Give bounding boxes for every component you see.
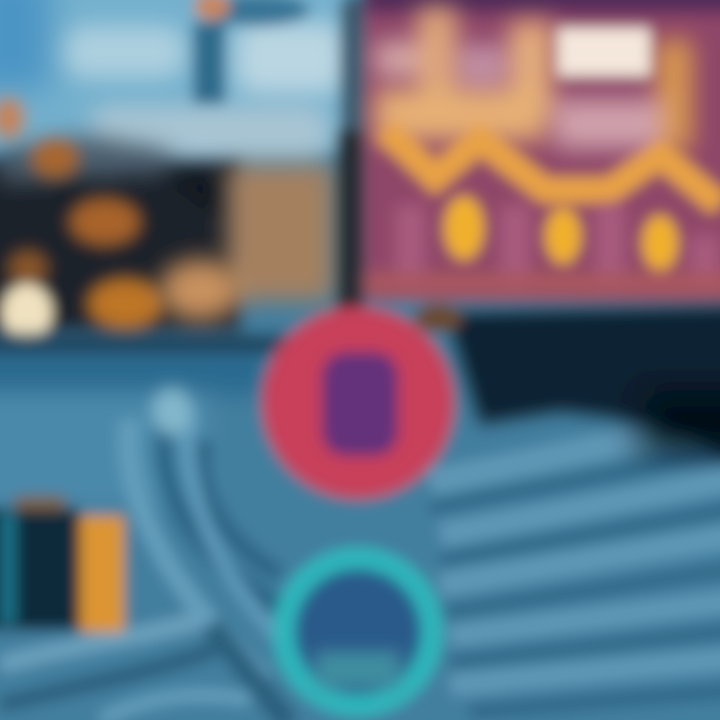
window: cream highlight <box>558 28 650 76</box>
panel: top left sky <box>0 0 345 160</box>
panel: right dark band <box>414 304 720 470</box>
panel: bottom right fan stripes <box>430 418 720 712</box>
window: yellow lamp 1 <box>444 196 484 260</box>
window: yellow lamp 2 <box>545 208 581 264</box>
icon: teal ring <box>284 558 432 706</box>
panel: middle left dark scene <box>0 98 333 353</box>
orange zigzag band <box>385 130 720 205</box>
window: yellow lamp 3 <box>642 215 678 271</box>
panel: top right purple building <box>365 0 720 300</box>
panel: centre divider <box>336 0 364 320</box>
panel: bottom left dark box <box>0 496 124 632</box>
icon: red circle <box>262 307 454 499</box>
panel: bottom left curved stripes <box>0 388 290 720</box>
